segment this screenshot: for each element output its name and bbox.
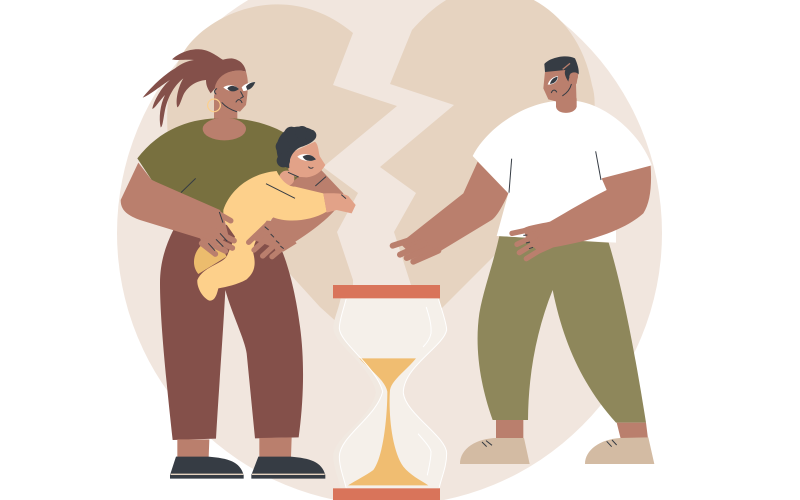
- woman right fingers: [249, 225, 286, 257]
- hourglass highlights: [339, 299, 447, 487]
- man eye: [548, 76, 558, 85]
- man left fingers: [393, 237, 438, 262]
- woman ankles: [177, 437, 292, 457]
- man head: [543, 60, 578, 102]
- man neck front: [556, 98, 577, 113]
- heart: left half: [167, 4, 397, 325]
- woman neck: [214, 95, 237, 127]
- man shirt: [473, 101, 652, 243]
- baby back leg: [194, 243, 227, 274]
- hourglass outer halo: [333, 298, 447, 488]
- baby onesie: [197, 171, 327, 301]
- man face lines: [551, 84, 571, 96]
- man right arm: [523, 166, 651, 253]
- woman upper lines: [139, 175, 326, 193]
- man right fingers: [512, 227, 547, 259]
- man ear: [569, 72, 578, 81]
- baby head: [288, 142, 325, 177]
- woman left arm: [121, 163, 228, 247]
- hourglass bottom bar: [333, 488, 440, 500]
- man hair: [544, 56, 579, 82]
- baby hand: [323, 193, 356, 213]
- woman collar: [203, 118, 246, 140]
- man shirt and hand lines: [509, 151, 601, 249]
- woman right palm: [253, 221, 297, 252]
- heart: right half: [380, 0, 595, 310]
- man left arm: [400, 162, 508, 257]
- baby hair: [276, 126, 316, 168]
- man trousers: [460, 236, 654, 464]
- baby: [194, 126, 356, 301]
- woman face: [214, 71, 248, 112]
- hourglass glass: [339, 298, 447, 488]
- woman: [137, 49, 343, 479]
- man neck: [556, 83, 577, 113]
- hourglass top bar: [333, 285, 440, 298]
- man sideburn highlight: [563, 63, 570, 69]
- hourglass: [333, 285, 447, 500]
- man shoes: [460, 437, 654, 464]
- woman right arm behind baby: [267, 163, 343, 253]
- woman arms over baby: [121, 163, 297, 257]
- background circle: [117, 0, 662, 500]
- woman trousers: [160, 223, 325, 479]
- baby lines: [266, 167, 346, 199]
- woman hair: [206, 58, 246, 93]
- woman shirt: [137, 118, 307, 217]
- man shoe laces: [482, 440, 617, 447]
- broken heart: [167, 0, 595, 325]
- woman hand lines: [208, 212, 284, 251]
- woman eyes: [223, 82, 255, 91]
- woman earring: [208, 99, 220, 112]
- baby eye: [297, 154, 316, 161]
- man: [393, 56, 654, 464]
- hourglass sand: [348, 358, 428, 485]
- woman left fingers: [202, 212, 234, 254]
- baby neck: [279, 171, 294, 186]
- man ankles: [496, 420, 648, 439]
- woman shoes: [170, 457, 325, 479]
- woman face lines: [215, 89, 243, 112]
- woman ponytail: [143, 49, 223, 127]
